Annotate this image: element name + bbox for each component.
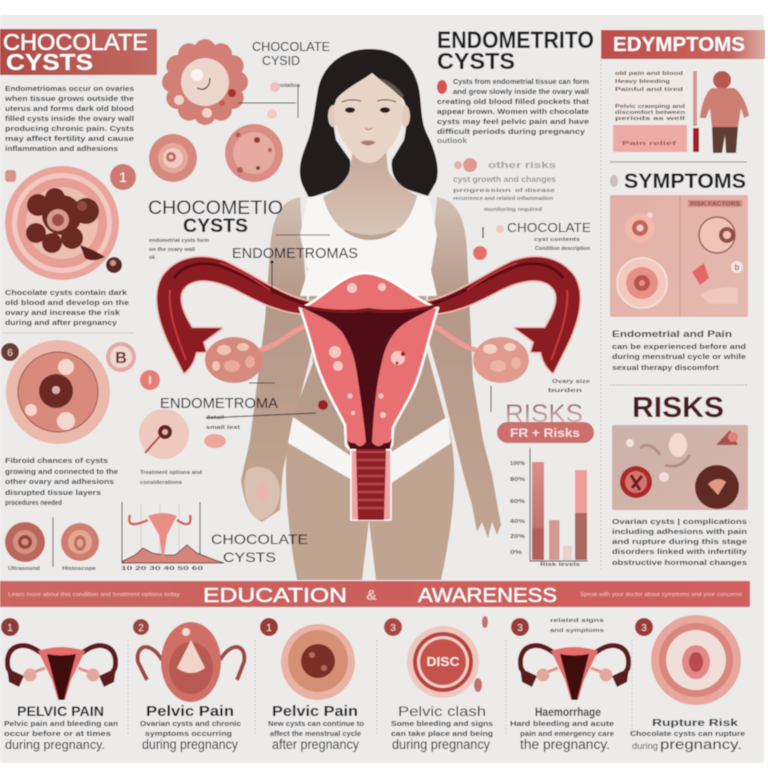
icon: biopsy disc: detail [206, 415, 225, 421]
panel: symptom images [610, 195, 748, 317]
label: chocolate right [473, 220, 591, 260]
text block: endometrito: and grow slowly inside the ovary wall [453, 87, 589, 96]
card 5: the pregnancy. [520, 737, 610, 752]
text block: chocolate cysts intro: may affect fertility and cause [5, 134, 134, 143]
panel: symptom images: RISK FACTORS [690, 202, 740, 208]
card 2: symptoms occurring [145, 729, 232, 738]
banner: education and awareness: Speak with your doctor about symptoms and your concerns [580, 592, 743, 598]
heading: chocometio cysts: endometrial cysts form [149, 238, 209, 244]
hair [300, 49, 438, 198]
faded text block: monitoring required [484, 207, 543, 213]
label: chocolate cysts chart: CHOCOLATE [211, 531, 308, 547]
underwear [288, 417, 352, 480]
badge: small [5, 170, 16, 182]
label: chocolate cysts chart [211, 531, 308, 565]
card 4 [384, 616, 493, 752]
text block: chocolate cysts note: Chocolate cysts contain dark [5, 288, 128, 297]
label: chocolate right: cyst contents [534, 237, 580, 243]
text block: chocolate cysts note: ovary and increase the risk [5, 308, 121, 317]
uterus diagram [157, 257, 580, 520]
panel: symptom figure [613, 69, 749, 153]
panel: symptom figure: discomfort between [615, 110, 686, 116]
text block: chocolate cysts intro: producing chronic pain. Cysts [5, 124, 134, 133]
text block: endometrito [437, 77, 590, 145]
faded text block: progression [453, 188, 512, 194]
banner: symptoms: EDYMPTOMS [613, 34, 745, 56]
heading: chocometio cysts: ok [149, 255, 156, 261]
text block: endometrito: creating old blood filled pockets that [437, 97, 590, 106]
card 6: pregnancy. [660, 737, 742, 752]
text block: left lower: other ovary and adhesions [5, 477, 114, 486]
card 4: DISC [426, 654, 460, 669]
heading: chocometio cysts [148, 198, 283, 261]
small label above risks: burden [548, 388, 583, 394]
text block: endometrial pain [612, 329, 746, 372]
small label above risks [491, 379, 590, 412]
text block: left lower [5, 456, 118, 507]
card 3 [260, 618, 364, 752]
small label above risks: Ovary size [552, 379, 590, 385]
text block: risks: obstructive hormonal changes [612, 558, 747, 567]
banner: education and awareness: & [366, 587, 377, 604]
label: chocolate right: Condition description [535, 246, 591, 252]
card 1: PELVIC PAIN [17, 703, 104, 719]
card 6: 3 [641, 623, 647, 634]
banner: education and awareness [0, 581, 750, 607]
card 2: 2 [138, 623, 144, 634]
icon: biopsy disc [139, 409, 240, 486]
card 6: Rupture Risk [652, 718, 739, 729]
card 1: occur before or at times [4, 729, 111, 738]
bar chart: 80% [510, 477, 525, 483]
icon: flower cyst [162, 39, 248, 125]
label: chocolate cysts small: CHOCOLATE [252, 40, 330, 54]
text block: endometrial pain: sexual therapy discomfort [612, 363, 720, 372]
badge: small pink [140, 370, 160, 390]
text block: chocolate cysts intro: when tissue grows outside the [4, 94, 134, 103]
badge: number left: 6 [7, 348, 13, 359]
text block: risks: disorders linked with infertility [612, 547, 748, 556]
text block: left lower: Fibroid chances of cysts [5, 456, 108, 465]
icon: ringed disc [149, 134, 197, 182]
header: chocolate cysts [0, 29, 157, 75]
heading: risks faded: RISKS [505, 400, 583, 428]
card 4: 3 [390, 623, 396, 634]
card 4: Some bleeding and signs [391, 719, 493, 728]
text block: left lower: disrupted tissue layers [5, 488, 101, 497]
text block: left lower: procedures needed [5, 498, 62, 507]
arm gaps [428, 338, 450, 420]
text block: endometrial pain: Endometrial and Pain [612, 329, 732, 339]
badge: number left [1, 343, 19, 361]
card 5: and symptoms [550, 628, 604, 634]
card 1 [1, 618, 118, 752]
icon: biopsy disc: small text [206, 425, 240, 431]
banner: education and awareness: AWARENESS [418, 584, 557, 607]
card 3: after pregnancy [272, 737, 359, 752]
card 1: 1 [7, 623, 13, 634]
panel: symptom figure: old pain and blood [615, 71, 684, 77]
card 1: during pregnancy. [5, 737, 105, 752]
icon: biopsy disc: considerations [140, 480, 182, 486]
card 6: Chocolate cysts can rupture [630, 729, 745, 738]
card 2: Pelvic Pain [146, 703, 234, 720]
card 6: during [632, 741, 658, 751]
panel: symptom figure: Pelvic cramping and [615, 104, 686, 110]
bar chart: 40% [510, 519, 525, 525]
card 2: Ovarian cysts and chronic [140, 719, 241, 728]
icons: small discs: Histoscope [62, 566, 96, 572]
pill: risks label [497, 422, 594, 443]
text block: risks: and rupture during this stage [612, 537, 747, 546]
side dashed divider [600, 60, 602, 570]
text block: chocolate cysts intro: Endometriomas occur on ovaries [5, 84, 134, 93]
card 2 [133, 619, 244, 752]
label: endometroma: ENDOMETROMA [160, 396, 278, 412]
faded text block: other risks [488, 160, 556, 170]
header: chocolate cysts: CHOCOLATE [3, 29, 148, 55]
ovary left [205, 337, 263, 383]
panel: risks images [612, 425, 748, 510]
header: chocolate cysts: CYSTS [6, 49, 93, 75]
card 5 [510, 618, 629, 752]
text block: chocolate cysts note: during and after pregnancy [5, 318, 118, 327]
banner: symptoms [601, 30, 765, 59]
text block: left lower: growing and connected to the [5, 467, 118, 476]
card 6 [630, 615, 745, 752]
label: chocolate right: CHOCOLATE [507, 220, 591, 235]
heading: symptoms: SYMPTOMS [624, 170, 746, 193]
heading: chocometio cysts: CHOCOMETIO [148, 198, 283, 219]
panel: symptom figure: periods as well [615, 116, 686, 122]
icon: virus cell [225, 124, 283, 182]
text block: endometrito: difficult periods during pregnancy [437, 127, 586, 136]
faded text block [453, 158, 557, 213]
icon: cyst cross-section [6, 340, 110, 444]
text block: endometrial pain: can be experienced before and [612, 342, 746, 351]
faded text block: cyst growth and changes [453, 175, 557, 184]
left hand highlight [244, 467, 280, 520]
cervix [345, 434, 393, 520]
label: chocolate cysts small: annotation [272, 83, 301, 89]
label: chocolate cysts small [238, 40, 330, 119]
text block: endometrito: outlook [437, 136, 468, 145]
label: chocolate cysts chart: CYSTS [223, 549, 276, 565]
banner: education and awareness: Learn more about this condition and treatment options today [8, 592, 181, 598]
card 3: Pelvic Pain [272, 703, 358, 720]
woman figure [241, 49, 501, 580]
icons: small discs [5, 517, 99, 572]
card 4: during pregnancy [392, 737, 490, 752]
bar chart: Risk levels [540, 562, 580, 568]
banner: education and awareness: EDUCATION [203, 584, 347, 607]
faded text block: of disease [515, 188, 555, 194]
small chart with uterus: 10 20 30 40 50 60 [121, 566, 203, 572]
icon: biopsy disc: Treatment options and [140, 470, 203, 476]
text block: endometrito: Cysts from endometrial tissue can form [453, 77, 589, 86]
neck and chest [320, 150, 422, 235]
heading: chocometio cysts: on the ovary wall [149, 247, 195, 253]
card 5: 3 [517, 623, 523, 634]
badge: number 1: 1 [119, 169, 127, 185]
heading: endometrito cysts [437, 27, 594, 74]
text block: risks [612, 517, 748, 567]
left arm [241, 197, 312, 522]
icons: small discs: Ultrasound [8, 566, 41, 572]
label: endometromas [232, 235, 358, 296]
card 5: related signs [550, 618, 604, 624]
bar chart: 20% [510, 534, 525, 540]
text block: endometrito: cysts may feel pelvic pain and have [437, 117, 589, 126]
card 4: Pelvic clash [398, 704, 486, 719]
bar chart: 0% [510, 550, 522, 556]
bar chart: 100% [510, 461, 525, 467]
face [335, 74, 403, 163]
uterine cavity [300, 305, 438, 442]
label: chocolate cysts small: CYSID [262, 54, 300, 68]
pill: risks label: FR + Risks [510, 426, 580, 440]
lesions [329, 283, 405, 418]
heading: endometrito cysts: CYSTS [437, 48, 515, 74]
text block: chocolate cysts intro: uterus and forms dark old blood [5, 104, 134, 113]
card 5: Haemorrhage [535, 705, 601, 719]
ligaments [260, 325, 308, 350]
text block: chocolate cysts intro: filled cysts inside the ovary wall [5, 114, 134, 123]
right arm [425, 197, 501, 538]
column dividers [128, 640, 632, 735]
badge: B: B [115, 350, 127, 367]
text block: chocolate cysts note [5, 288, 129, 327]
text block: risks: Ovarian cysts | complications [612, 517, 747, 526]
fallopian tubes [157, 257, 580, 373]
bar chart: 60% [510, 499, 525, 505]
card 3: 1 [266, 623, 272, 634]
heading: endometrito cysts: ENDOMETRITO [437, 27, 594, 54]
text block: chocolate cysts intro [4, 84, 134, 153]
panel: symptom figure: Heavy bleeding [615, 79, 671, 85]
icon: chocolate cluster [5, 166, 122, 280]
panel: symptom figure: Pain relief [622, 141, 676, 147]
text block: risks: including adhesions with pain [612, 527, 747, 536]
ovary right [473, 337, 529, 383]
card 1: Pelvic pain and bleeding can [4, 719, 118, 728]
card 3: New cysts can continue to [268, 719, 364, 728]
panel: symptom figure: Painful and tired [615, 87, 684, 93]
label: endometromas: ENDOMETROMAS [232, 245, 358, 262]
text block: chocolate cysts note: old blood and develop on the [5, 298, 129, 307]
torso and legs [286, 230, 454, 580]
uterine body [300, 273, 438, 449]
text block: endometrito: appear brown. Women with chocolate [437, 107, 589, 116]
card 4: can take place and being [391, 729, 493, 738]
ears [328, 105, 338, 127]
label: endometroma [160, 383, 328, 418]
card 3: affect the menstrual cycle [270, 729, 361, 738]
card 5: Hard bleeding and acute [510, 719, 614, 728]
text block: endometrial pain: during menstrual cycle or while [612, 352, 746, 361]
card 5: pain and emergency care [520, 729, 614, 738]
badge: number 1 [110, 164, 136, 190]
white top [300, 196, 437, 296]
card 2: during pregnancy [142, 737, 238, 752]
badge: B [106, 342, 136, 372]
text block: chocolate cysts intro: inflammation and adhesions [5, 144, 118, 153]
bar chart [510, 448, 588, 568]
faded text block: recurrence and related inflammation [453, 196, 554, 202]
panel: symptom images: b [735, 263, 740, 272]
eyes, brows, mouth [342, 100, 396, 102]
heading: chocometio cysts: CYSTS [183, 216, 248, 237]
small chart with uterus [121, 502, 224, 572]
heading: risks: RISKS [632, 392, 724, 424]
